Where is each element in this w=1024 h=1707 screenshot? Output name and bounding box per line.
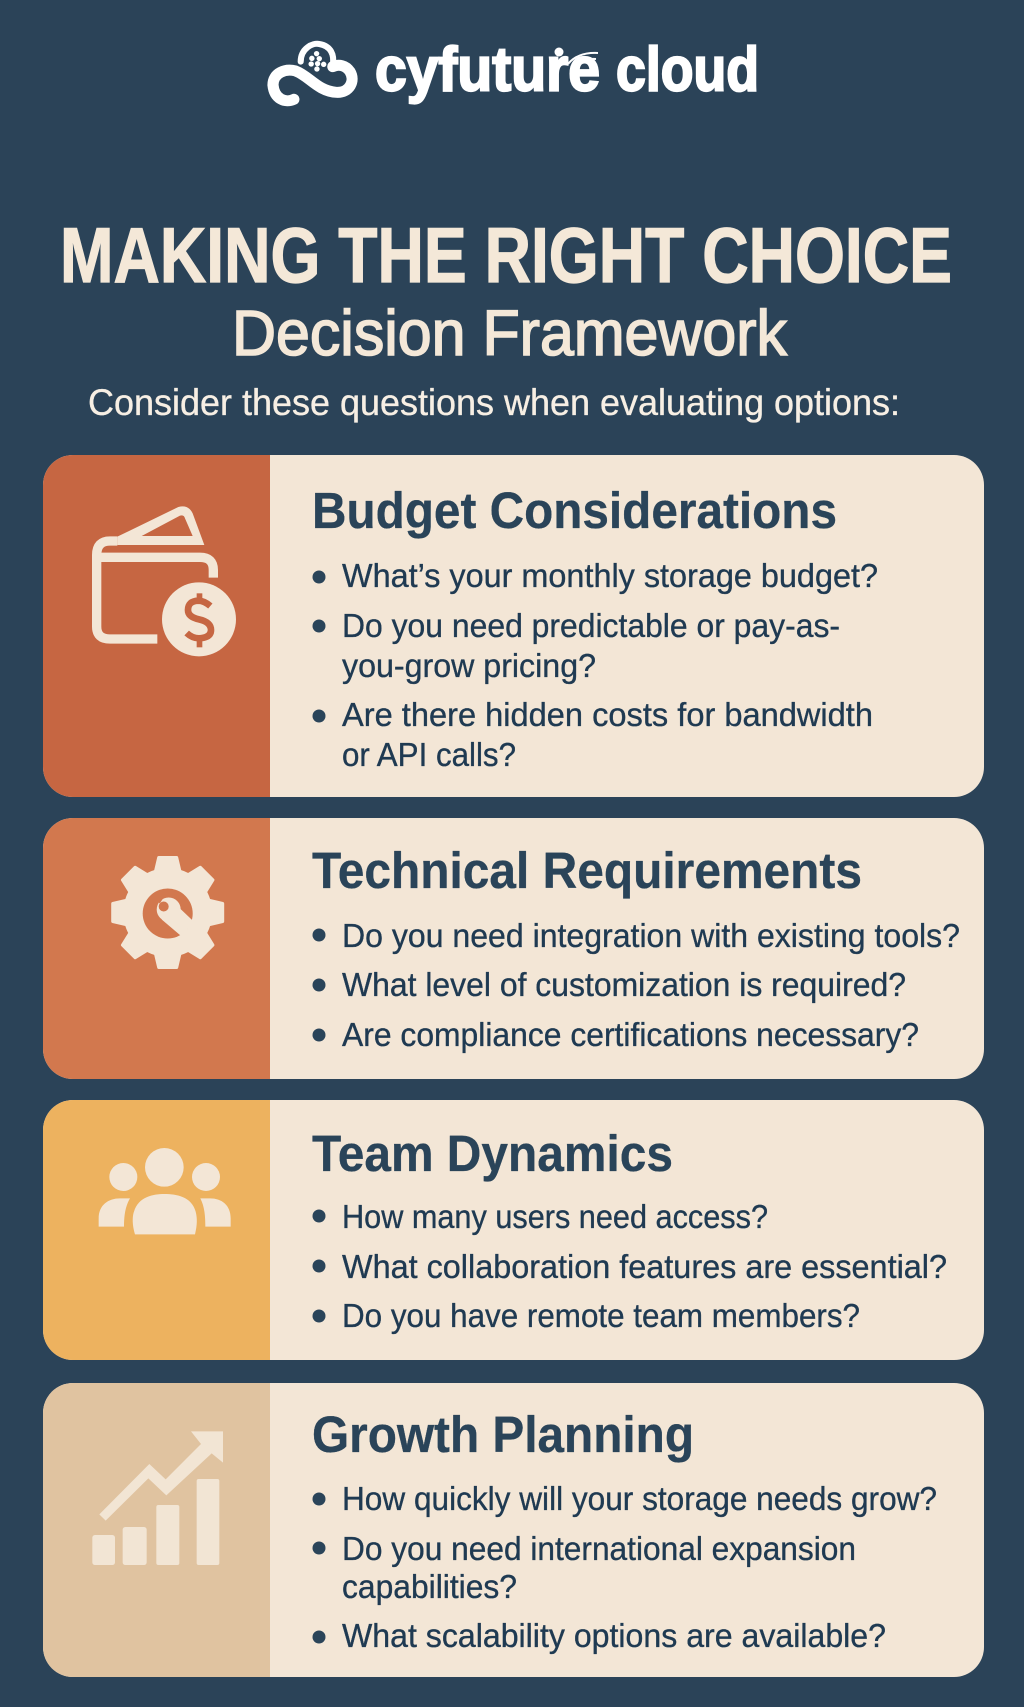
bullet list: What level of customization is required? — [342, 966, 906, 1003]
icon: cloud logo mark — [273, 44, 352, 101]
icon: three people — [99, 1148, 231, 1234]
bullet list: Are compliance certifications necessary? — [342, 1016, 919, 1053]
bullet list: Do you have remote team members? — [342, 1297, 860, 1334]
panel: budget considerations — [43, 455, 984, 797]
bullet list: Do you need integration with existing tools? — [342, 917, 960, 954]
bullet list — [312, 557, 878, 773]
logo wordmark: cyfuture — [375, 36, 600, 104]
bullet list — [312, 1480, 937, 1654]
bullet list — [312, 917, 960, 1053]
panel: team dynamics — [43, 1100, 984, 1360]
panel: technical requirements — [43, 818, 984, 1079]
logo wordmark — [375, 36, 759, 104]
bullet list: Do you need predictable or pay-as- — [342, 607, 840, 644]
subtitle: Decision Framework — [232, 297, 788, 369]
intro line: Consider these questions when evaluating options: — [88, 382, 900, 423]
panel: growth planning — [43, 1383, 984, 1677]
bullet list — [312, 1198, 947, 1334]
bullet list: What collaboration features are essential? — [342, 1248, 947, 1285]
icon: growth chart with arrow — [92, 1431, 223, 1565]
bullet list: What’s your monthly storage budget? — [342, 557, 878, 594]
logo wordmark: cloud — [616, 36, 759, 104]
heading: Technical Requirements — [312, 842, 862, 899]
heading: Growth Planning — [312, 1406, 694, 1463]
bullet list: How quickly will your storage needs grow? — [342, 1480, 937, 1517]
bullet list: you-grow pricing? — [342, 647, 596, 684]
bullet list: capabilities? — [342, 1568, 517, 1605]
icon: wallet with dollar coin — [97, 506, 236, 656]
icon: gear with wrench — [113, 858, 223, 968]
bullet list: Do you need international expansion — [342, 1530, 856, 1567]
heading: Budget Considerations — [312, 482, 837, 539]
bullet list: What scalability options are available? — [342, 1617, 886, 1654]
bullet list: Are there hidden costs for bandwidth — [342, 696, 873, 733]
bullet list: or API calls? — [342, 736, 516, 773]
heading: Team Dynamics — [312, 1125, 673, 1182]
logo: cyfuture cloud — [273, 36, 759, 104]
logo swoosh — [554, 48, 598, 67]
bullet list: How many users need access? — [342, 1198, 768, 1235]
